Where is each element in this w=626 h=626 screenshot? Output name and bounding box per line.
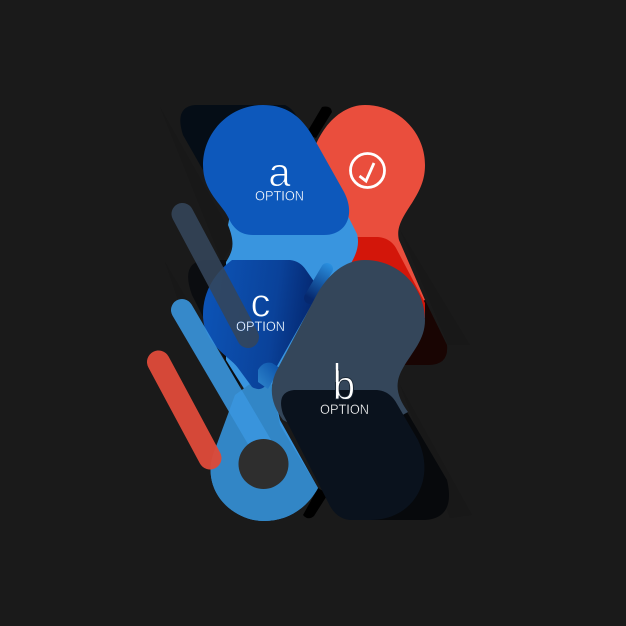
red lower section bbox=[335, 237, 425, 318]
small blue pill bbox=[258, 363, 280, 389]
label: option c: c bbox=[250, 282, 270, 326]
icon: check mark bbox=[350, 154, 384, 188]
label: option a bbox=[255, 151, 304, 204]
label: option a: a bbox=[268, 151, 291, 195]
blue glow strip bbox=[310, 269, 327, 298]
dark circle bbox=[238, 439, 288, 489]
label: option b: OPTION bbox=[320, 401, 369, 417]
panel: option a light blue body with ring bbox=[211, 200, 358, 521]
blue pill bbox=[182, 310, 263, 448]
shadow shapes bbox=[180, 105, 449, 520]
faint shadow strokes bbox=[160, 107, 472, 518]
panel: red option bbox=[313, 105, 425, 320]
label: option b bbox=[320, 363, 369, 417]
label: option c bbox=[236, 282, 285, 334]
panel: option a head bbox=[203, 105, 349, 235]
label: option c: OPTION bbox=[236, 318, 285, 334]
slate pill bbox=[182, 214, 248, 337]
red pill bbox=[158, 362, 210, 458]
panel: option b bbox=[272, 260, 425, 520]
panel: option c bbox=[203, 260, 327, 389]
label: option a: OPTION bbox=[255, 188, 304, 204]
option b lower panel bbox=[281, 390, 424, 520]
label: option b: b bbox=[333, 364, 355, 408]
